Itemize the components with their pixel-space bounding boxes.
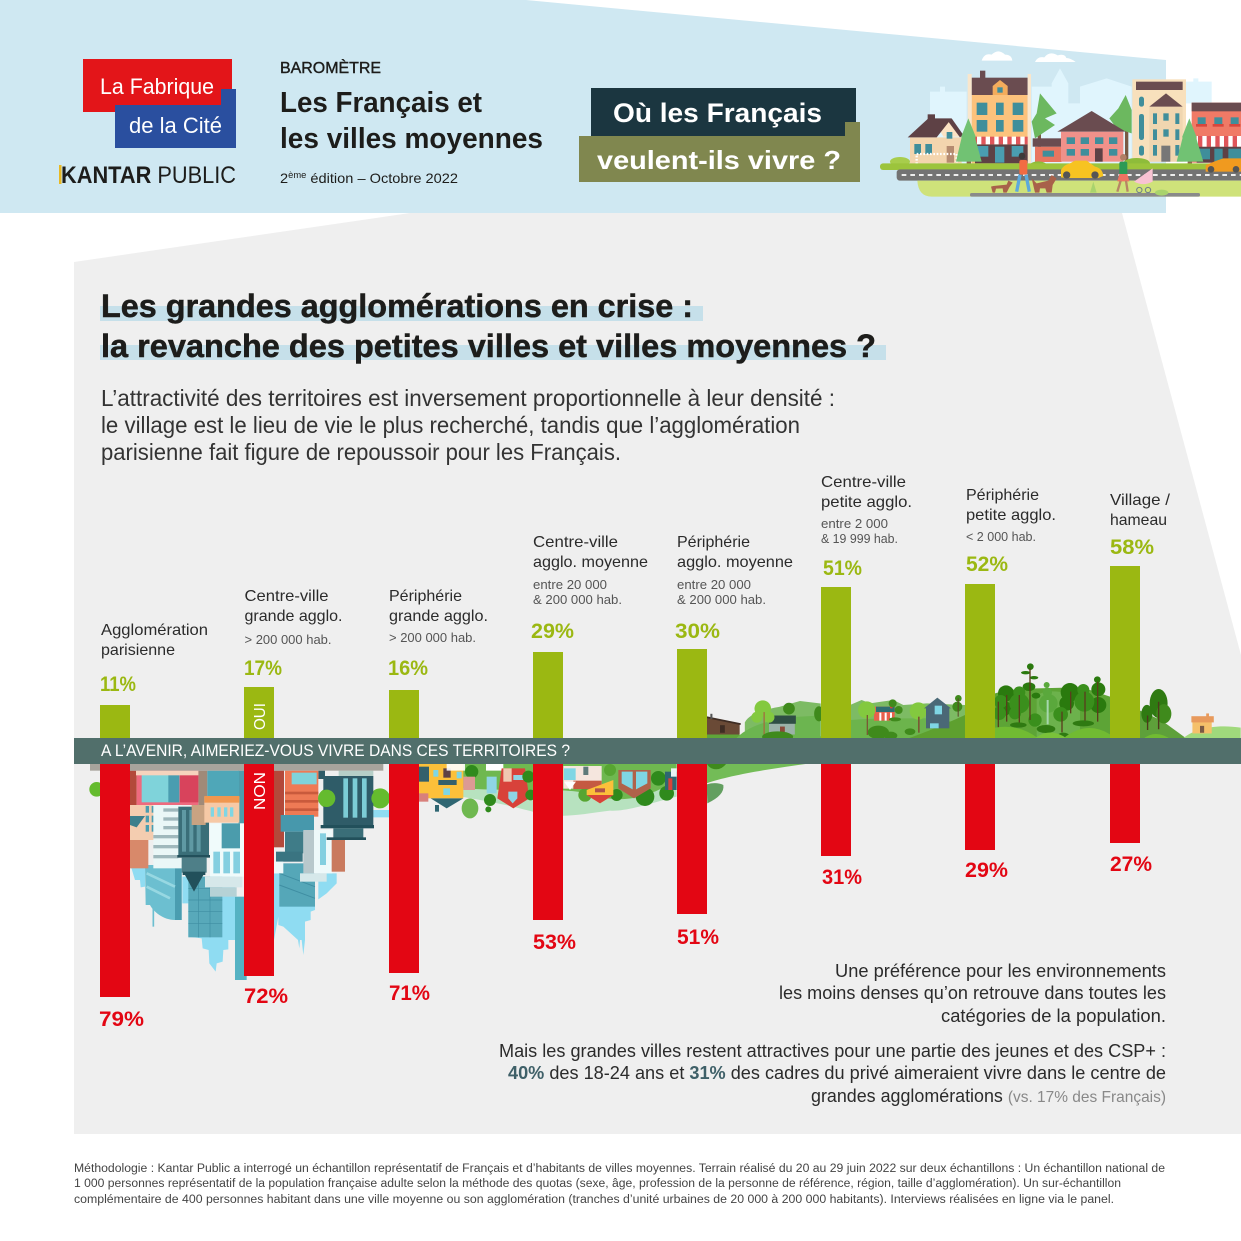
header title block: édition – Octobre 2022 (306, 170, 458, 186)
header band (0, 0, 1166, 213)
intro text: le village est le lieu de vie le plus recherché, tandis que l’agglomération (101, 412, 800, 438)
ground, road (1123, 158, 1150, 169)
logo: La Fabrique de la Cité: La Fabrique (100, 74, 214, 99)
text block: preference: catégories de la population. (941, 1005, 1166, 1026)
label: Agglomération parisienne: parisienne (101, 642, 175, 659)
text block: big cities (499, 1040, 1166, 1106)
label: Périphérie agglo. moyenne: agglo. moyenne (677, 554, 793, 571)
header question badge: veulent-ils vivre ? (597, 145, 841, 175)
question band (74, 738, 1241, 764)
illustration: upside-down city below band (89, 763, 390, 980)
text block: preference: Une préférence pour les environnements (835, 960, 1166, 981)
label: Centre-ville petite agglo.: petite agglo. (821, 494, 912, 511)
label: Périphérie grande agglo.: Périphérie (389, 588, 462, 605)
label: Périphérie agglo. moyenne: entre 20 000 (677, 578, 751, 592)
bar chart: NON bars (100, 764, 1140, 997)
footer methodology: 1 000 personnes représentatif de la population française adulte selon la méthode des quotas (sexe, âge, profession de la personne de référence, région, taille d’agglomération). Un sur-échantillon (74, 1178, 1121, 1190)
heading with highlight: Les grandes agglomérations en crise : (101, 288, 693, 324)
tree (1038, 130, 1041, 150)
label: Périphérie petite agglo.: < 2 000 hab. (966, 530, 1036, 544)
intro text: parisienne fait figure de repoussoir pour les Français. (101, 439, 621, 465)
backing columns (198, 771, 207, 826)
label: Périphérie agglo. moyenne: Périphérie (677, 534, 750, 551)
header question badge: Où les Français (613, 98, 822, 128)
label: Périphérie petite agglo.: 52% (966, 553, 1008, 576)
label: Périphérie agglo. moyenne: 51% (677, 926, 719, 949)
text block: big cities: Mais les grandes villes restent attractives pour une partie des jeunes et des CSP+ : (499, 1040, 1166, 1061)
footer methodology (74, 1163, 1165, 1206)
grey content panel (74, 213, 1241, 1134)
label: Centre-ville agglo. moyenne: & 200 000 hab. (533, 593, 622, 607)
label: Périphérie grande agglo. (388, 588, 488, 1005)
red shop (1192, 103, 1241, 163)
hamlet hills (850, 700, 965, 738)
label: Centre-ville agglo. moyenne: 53% (533, 931, 576, 954)
text block: preference (779, 960, 1166, 1026)
illustration: upside-down village below band (418, 763, 810, 818)
header title block: Les Français et (280, 87, 482, 119)
label: Centre-ville agglo. moyenne: Centre-ville (533, 534, 618, 551)
label: Centre-ville agglo. moyenne: agglo. moyenne (533, 554, 648, 571)
dogs (991, 181, 1013, 193)
label: Périphérie petite agglo.: 29% (965, 859, 1008, 882)
pink house (1035, 147, 1062, 162)
intro text (101, 385, 835, 465)
label: Périphérie petite agglo.: petite agglo. (966, 507, 1056, 524)
label: Périphérie agglo. moyenne (675, 534, 793, 949)
illustration: forest and hamlet (850, 663, 1110, 740)
label: Village / hameau: hameau (1110, 512, 1167, 529)
header title block: BAROMÈTRE (280, 58, 381, 77)
label: Périphérie petite agglo. (965, 487, 1056, 882)
label: Village / hameau (1110, 492, 1171, 876)
label: Centre-ville agglo. moyenne (531, 534, 648, 954)
heading with highlight: la revanche des petites villes et villes moyennes ? (101, 328, 876, 364)
text block: big cities: grandes agglomérations (vs. 17% des Français) (811, 1085, 1166, 1106)
label: Centre-ville petite agglo. (821, 474, 912, 889)
logo: La Fabrique de la Cité: de la Cité (129, 113, 222, 138)
label: Agglomération parisienne (99, 622, 208, 1031)
header question badge (579, 88, 860, 182)
label: Centre-ville grande agglo.: 72% (244, 985, 288, 1008)
label: Périphérie grande agglo.: > 200 000 hab. (389, 631, 476, 645)
label: Centre-ville grande agglo. (244, 588, 342, 1008)
label: Centre-ville petite agglo.: Centre-ville (821, 474, 906, 491)
left blocks (130, 771, 137, 817)
label: Centre-ville petite agglo.: 31% (822, 866, 862, 889)
green trees (967, 160, 971, 170)
label: Centre-ville agglo. moyenne: 29% (531, 620, 574, 643)
logo: La Fabrique de la Cité (83, 59, 236, 148)
cream tower (1132, 79, 1186, 162)
house green roof (769, 723, 795, 734)
header title block: les villes moyennes (280, 123, 543, 155)
tall building (972, 95, 1028, 163)
question band: A L’AVENIR, AIMERIEZ-VOUS VIVRE DANS CES TERRITOIRES ? (101, 742, 570, 760)
mid houses (578, 764, 674, 806)
label: Centre-ville petite agglo.: & 19 999 hab. (821, 532, 898, 546)
pale skyline (130, 863, 235, 972)
taxi (1061, 161, 1103, 178)
curved glass tower (145, 865, 182, 920)
label: Centre-ville grande agglo.: 17% (244, 657, 282, 680)
trees (751, 700, 774, 723)
text block: preference: les moins denses qu’on retrouve dans toutes les (779, 982, 1166, 1003)
header title block: 2 (280, 170, 288, 186)
header title block (280, 58, 543, 186)
heading with highlight (100, 288, 886, 364)
label: Périphérie grande agglo.: grande agglo. (389, 608, 488, 625)
right blocks (274, 771, 284, 847)
label: Centre-ville petite agglo.: entre 2 000 (821, 517, 888, 531)
label: Village / hameau: 58% (1110, 536, 1154, 559)
yellow house (418, 763, 463, 798)
illustration: countryside above band (707, 689, 1241, 744)
forest (995, 688, 1110, 738)
text block: big cities: 40% des 18-24 ans et 31% des cadres du privé aimeraient vivre dans le centre de (508, 1062, 1166, 1083)
label: Périphérie grande agglo.: 71% (389, 982, 430, 1005)
label: Agglomération parisienne: 11% (100, 673, 136, 696)
label: Centre-ville grande agglo.: > 200 000 hab. (244, 633, 332, 647)
house left (910, 137, 962, 163)
roof slab (90, 763, 383, 771)
label: Agglomération parisienne: Agglomération (101, 622, 208, 639)
label: Centre-ville petite agglo.: 51% (823, 557, 862, 580)
orange car (1206, 158, 1241, 172)
label: Périphérie agglo. moyenne: 30% (675, 620, 720, 643)
red house (497, 768, 529, 808)
axis label: NON: NON (252, 772, 269, 810)
bar chart: OUI bars (100, 566, 1140, 738)
label: Village / hameau: Village / (1110, 492, 1171, 509)
label: Centre-ville agglo. moyenne: entre 20 000 (533, 578, 607, 592)
label: Périphérie grande agglo.: 16% (388, 657, 428, 680)
footer methodology: Méthodologie : Kantar Public a interrogé un échantillon représentatif de Français et d’habitants de villes moyennes. Terrain réalisé du 20 au 29 juin 2022 sur deux échantillons : Un échantillon national de (74, 1163, 1165, 1175)
label: Périphérie petite agglo.: Périphérie (966, 487, 1039, 504)
logo: Kantar Public: KANTAR PUBLIC (61, 162, 236, 189)
walkers (1019, 153, 1025, 159)
label: Centre-ville grande agglo.: Centre-ville (244, 588, 329, 605)
label: Agglomération parisienne: 79% (99, 1008, 144, 1031)
intro text: L’attractivité des territoires est inversement proportionnelle à leur densité : (101, 385, 835, 411)
label: Centre-ville grande agglo.: grande agglo. (244, 608, 342, 625)
label: Village / hameau: 27% (1110, 853, 1152, 876)
illustration: town street (880, 51, 1241, 197)
footer methodology: complémentaire de 400 personnes habitant dans une ville moyenne ou son agglomération (tranches d’unité urbaines de 20 000 à 200 000 habitants). Interviews réalisées en ligne via le panel. (74, 1194, 1114, 1206)
right grove (1140, 710, 1189, 740)
axis label: OUI: OUI (252, 703, 269, 730)
header title block: ème (288, 170, 306, 180)
label: Périphérie agglo. moyenne: & 200 000 hab. (677, 593, 766, 607)
